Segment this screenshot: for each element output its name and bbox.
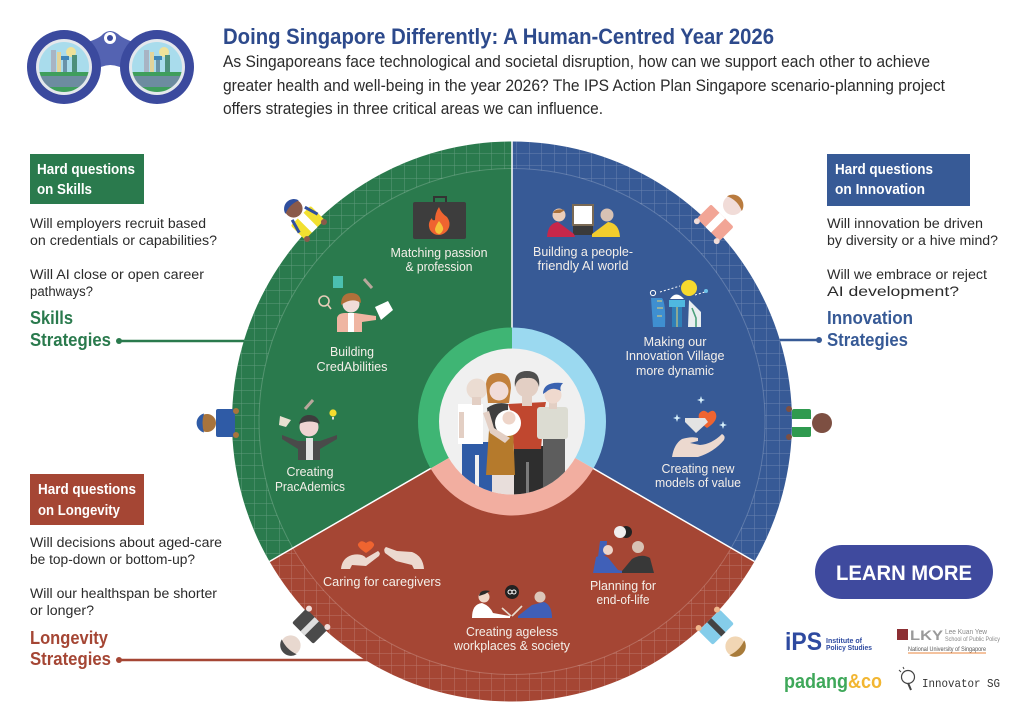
label: creating pracademics: PracAdemics bbox=[275, 480, 345, 494]
logo: institute of policy studies: Policy Studies bbox=[826, 643, 872, 652]
connector: skills bbox=[116, 338, 250, 344]
intro text: greater health and well-being in the year 2026? The IPS Action Plan Singapore scenario-planning project bbox=[223, 77, 945, 95]
logo: innovator sg bbox=[899, 667, 1000, 691]
label: ageless workplaces: workplaces & society bbox=[453, 639, 571, 653]
intro text: As Singaporeans face technological and societal disruption, how can we support each other to achieve bbox=[223, 53, 930, 71]
logo: institute of policy studies: Institute of bbox=[826, 636, 862, 645]
panel: longevity sector bbox=[270, 422, 754, 702]
logo: lee kuan yew school bbox=[897, 628, 1000, 654]
characters peeking around the circle bbox=[197, 186, 832, 665]
panel: hard questions on innovation: on Innovation bbox=[835, 182, 925, 198]
label: ageless workplaces bbox=[453, 625, 571, 653]
icon: binoculars logo bbox=[27, 30, 194, 104]
logo: lee kuan yew school: Lee Kuan Yew bbox=[945, 629, 988, 636]
centre ring: green bbox=[418, 328, 512, 468]
logo: institute of policy studies: iPS bbox=[785, 628, 822, 656]
character: man in dark jacket bbox=[272, 604, 332, 664]
label: creating pracademics: Creating bbox=[286, 465, 334, 479]
panel: hard questions on longevity bbox=[30, 474, 222, 618]
logo: innovator sg: Innovator SG bbox=[922, 677, 1000, 691]
label: new models of value: models of value bbox=[655, 476, 741, 490]
character: man in light blue bbox=[694, 605, 754, 665]
panel: hard questions on skills: Hard questions bbox=[37, 162, 135, 178]
panel: innovation sector bbox=[512, 141, 792, 561]
button: learn more: LEARN MORE bbox=[836, 562, 972, 585]
icon: creating pracademics figure bbox=[279, 400, 337, 460]
label: building credabilities: Building bbox=[330, 345, 374, 359]
intro text bbox=[223, 53, 945, 118]
logo: lee kuan yew school: National University of Singapore bbox=[908, 647, 987, 653]
heading: skills strategies: Strategies bbox=[30, 329, 111, 350]
icon: people and computer bbox=[547, 204, 620, 237]
label: end of life bbox=[590, 579, 656, 607]
centre ring: pink bbox=[431, 422, 593, 515]
heading: skills strategies: Skills bbox=[30, 307, 73, 328]
panel: hard questions on longevity: be top-down or bottom-up? bbox=[30, 552, 195, 567]
panel: skills sector bbox=[232, 141, 512, 561]
boy bbox=[537, 383, 568, 487]
label: innovation village: more dynamic bbox=[636, 364, 714, 378]
panel: hard questions on innovation: by diversity or a hive mind? bbox=[827, 233, 998, 248]
illustration: family bbox=[458, 371, 568, 500]
panel: hard questions on innovation: Will we embrace or reject bbox=[827, 267, 987, 282]
heading: longevity strategies bbox=[30, 627, 111, 669]
icon: briefcase with flame bbox=[413, 197, 466, 239]
label: people friendly ai: Building a people- bbox=[533, 245, 633, 259]
label: ageless workplaces: Creating ageless bbox=[466, 625, 558, 639]
label: matching passion: Matching passion bbox=[390, 246, 488, 260]
label: building credabilities: CredAbilities bbox=[316, 360, 388, 374]
label: matching passion bbox=[390, 246, 488, 274]
label: innovation village: Innovation Village bbox=[626, 349, 725, 363]
label: caring for caregivers: Caring for caregivers bbox=[323, 575, 441, 589]
label: new models of value: Creating new bbox=[662, 462, 735, 476]
character: woman with braids bbox=[276, 191, 328, 243]
panel: hard questions on skills: Will AI close or open career bbox=[30, 267, 205, 282]
heading: innovation strategies: Strategies bbox=[827, 329, 908, 350]
mother with baby bbox=[483, 373, 521, 500]
label: innovation village bbox=[626, 335, 725, 378]
father bbox=[508, 371, 546, 496]
label: matching passion: & profession bbox=[406, 260, 473, 274]
panel: hard questions on longevity: Will our healthspan be shorter bbox=[30, 586, 218, 601]
heading: longevity strategies: Strategies bbox=[30, 648, 111, 669]
icon: caring hands bbox=[341, 541, 424, 569]
label: end of life: end-of-life bbox=[596, 593, 650, 607]
logo: padang and co: padang&co bbox=[784, 671, 882, 693]
panel: hard questions on innovation: Hard questions bbox=[835, 162, 933, 178]
centre disc bbox=[439, 348, 585, 494]
heading: longevity strategies: Longevity bbox=[30, 627, 109, 648]
elder bbox=[458, 378, 492, 497]
character: woman with brown hair bbox=[693, 186, 752, 245]
label: creating pracademics bbox=[275, 465, 345, 494]
icon: building credabilities figure bbox=[319, 276, 393, 332]
label: end of life: Planning for bbox=[590, 579, 656, 593]
circular diagram bbox=[232, 141, 792, 702]
heading: skills strategies bbox=[30, 307, 111, 350]
label: people friendly ai: friendly AI world bbox=[538, 259, 629, 273]
panel: hard questions on longevity: Hard questions bbox=[38, 482, 136, 498]
icon: innovation village bbox=[650, 280, 708, 327]
intro text: offers strategies in three critical areas we can influence. bbox=[223, 100, 603, 118]
panel: hard questions on skills: Will employers recruit based bbox=[30, 216, 206, 231]
label: people friendly ai bbox=[533, 245, 633, 273]
panel: hard questions on skills: on Skills bbox=[37, 182, 92, 198]
panel: hard questions on skills bbox=[30, 154, 217, 299]
heading: innovation strategies: Innovation bbox=[827, 307, 913, 328]
heading: innovation strategies bbox=[827, 307, 913, 350]
logo: lee kuan yew school: LKY bbox=[910, 628, 943, 643]
label: building credabilities bbox=[316, 345, 388, 374]
panel: hard questions on skills: on credentials or capabilities? bbox=[30, 233, 217, 248]
panel: hard questions on longevity: or longer? bbox=[30, 603, 94, 618]
button: learn more bbox=[815, 545, 993, 599]
label: innovation village: Making our bbox=[644, 335, 706, 349]
centre ring: light blue bbox=[512, 328, 606, 468]
panel: hard questions on longevity: on Longevity bbox=[38, 503, 120, 519]
panel: hard questions on longevity: Will decisions about aged-care bbox=[30, 535, 222, 550]
panel: hard questions on innovation: AI development? bbox=[827, 284, 959, 299]
connector: longevity bbox=[116, 657, 370, 663]
character: elder in green bbox=[786, 406, 832, 440]
panel: hard questions on innovation: Will innovation be driven bbox=[827, 216, 983, 231]
label: new models of value bbox=[655, 462, 741, 490]
connector: innovation bbox=[775, 337, 822, 343]
panel: hard questions on innovation bbox=[827, 154, 998, 299]
logo: institute of policy studies bbox=[785, 628, 872, 656]
character: man in blue bbox=[197, 408, 239, 438]
logo: lee kuan yew school: School of Public Policy bbox=[945, 637, 1000, 643]
title: Doing Singapore Differently: A Human-Centred Year 2026 bbox=[223, 24, 774, 49]
icon: ageless workplace bbox=[472, 585, 552, 618]
icon: diamond and heart in hand bbox=[672, 396, 727, 457]
grid band bbox=[232, 141, 792, 702]
panel: hard questions on skills: pathways? bbox=[30, 284, 93, 299]
icon: end of life conversation bbox=[593, 526, 654, 573]
